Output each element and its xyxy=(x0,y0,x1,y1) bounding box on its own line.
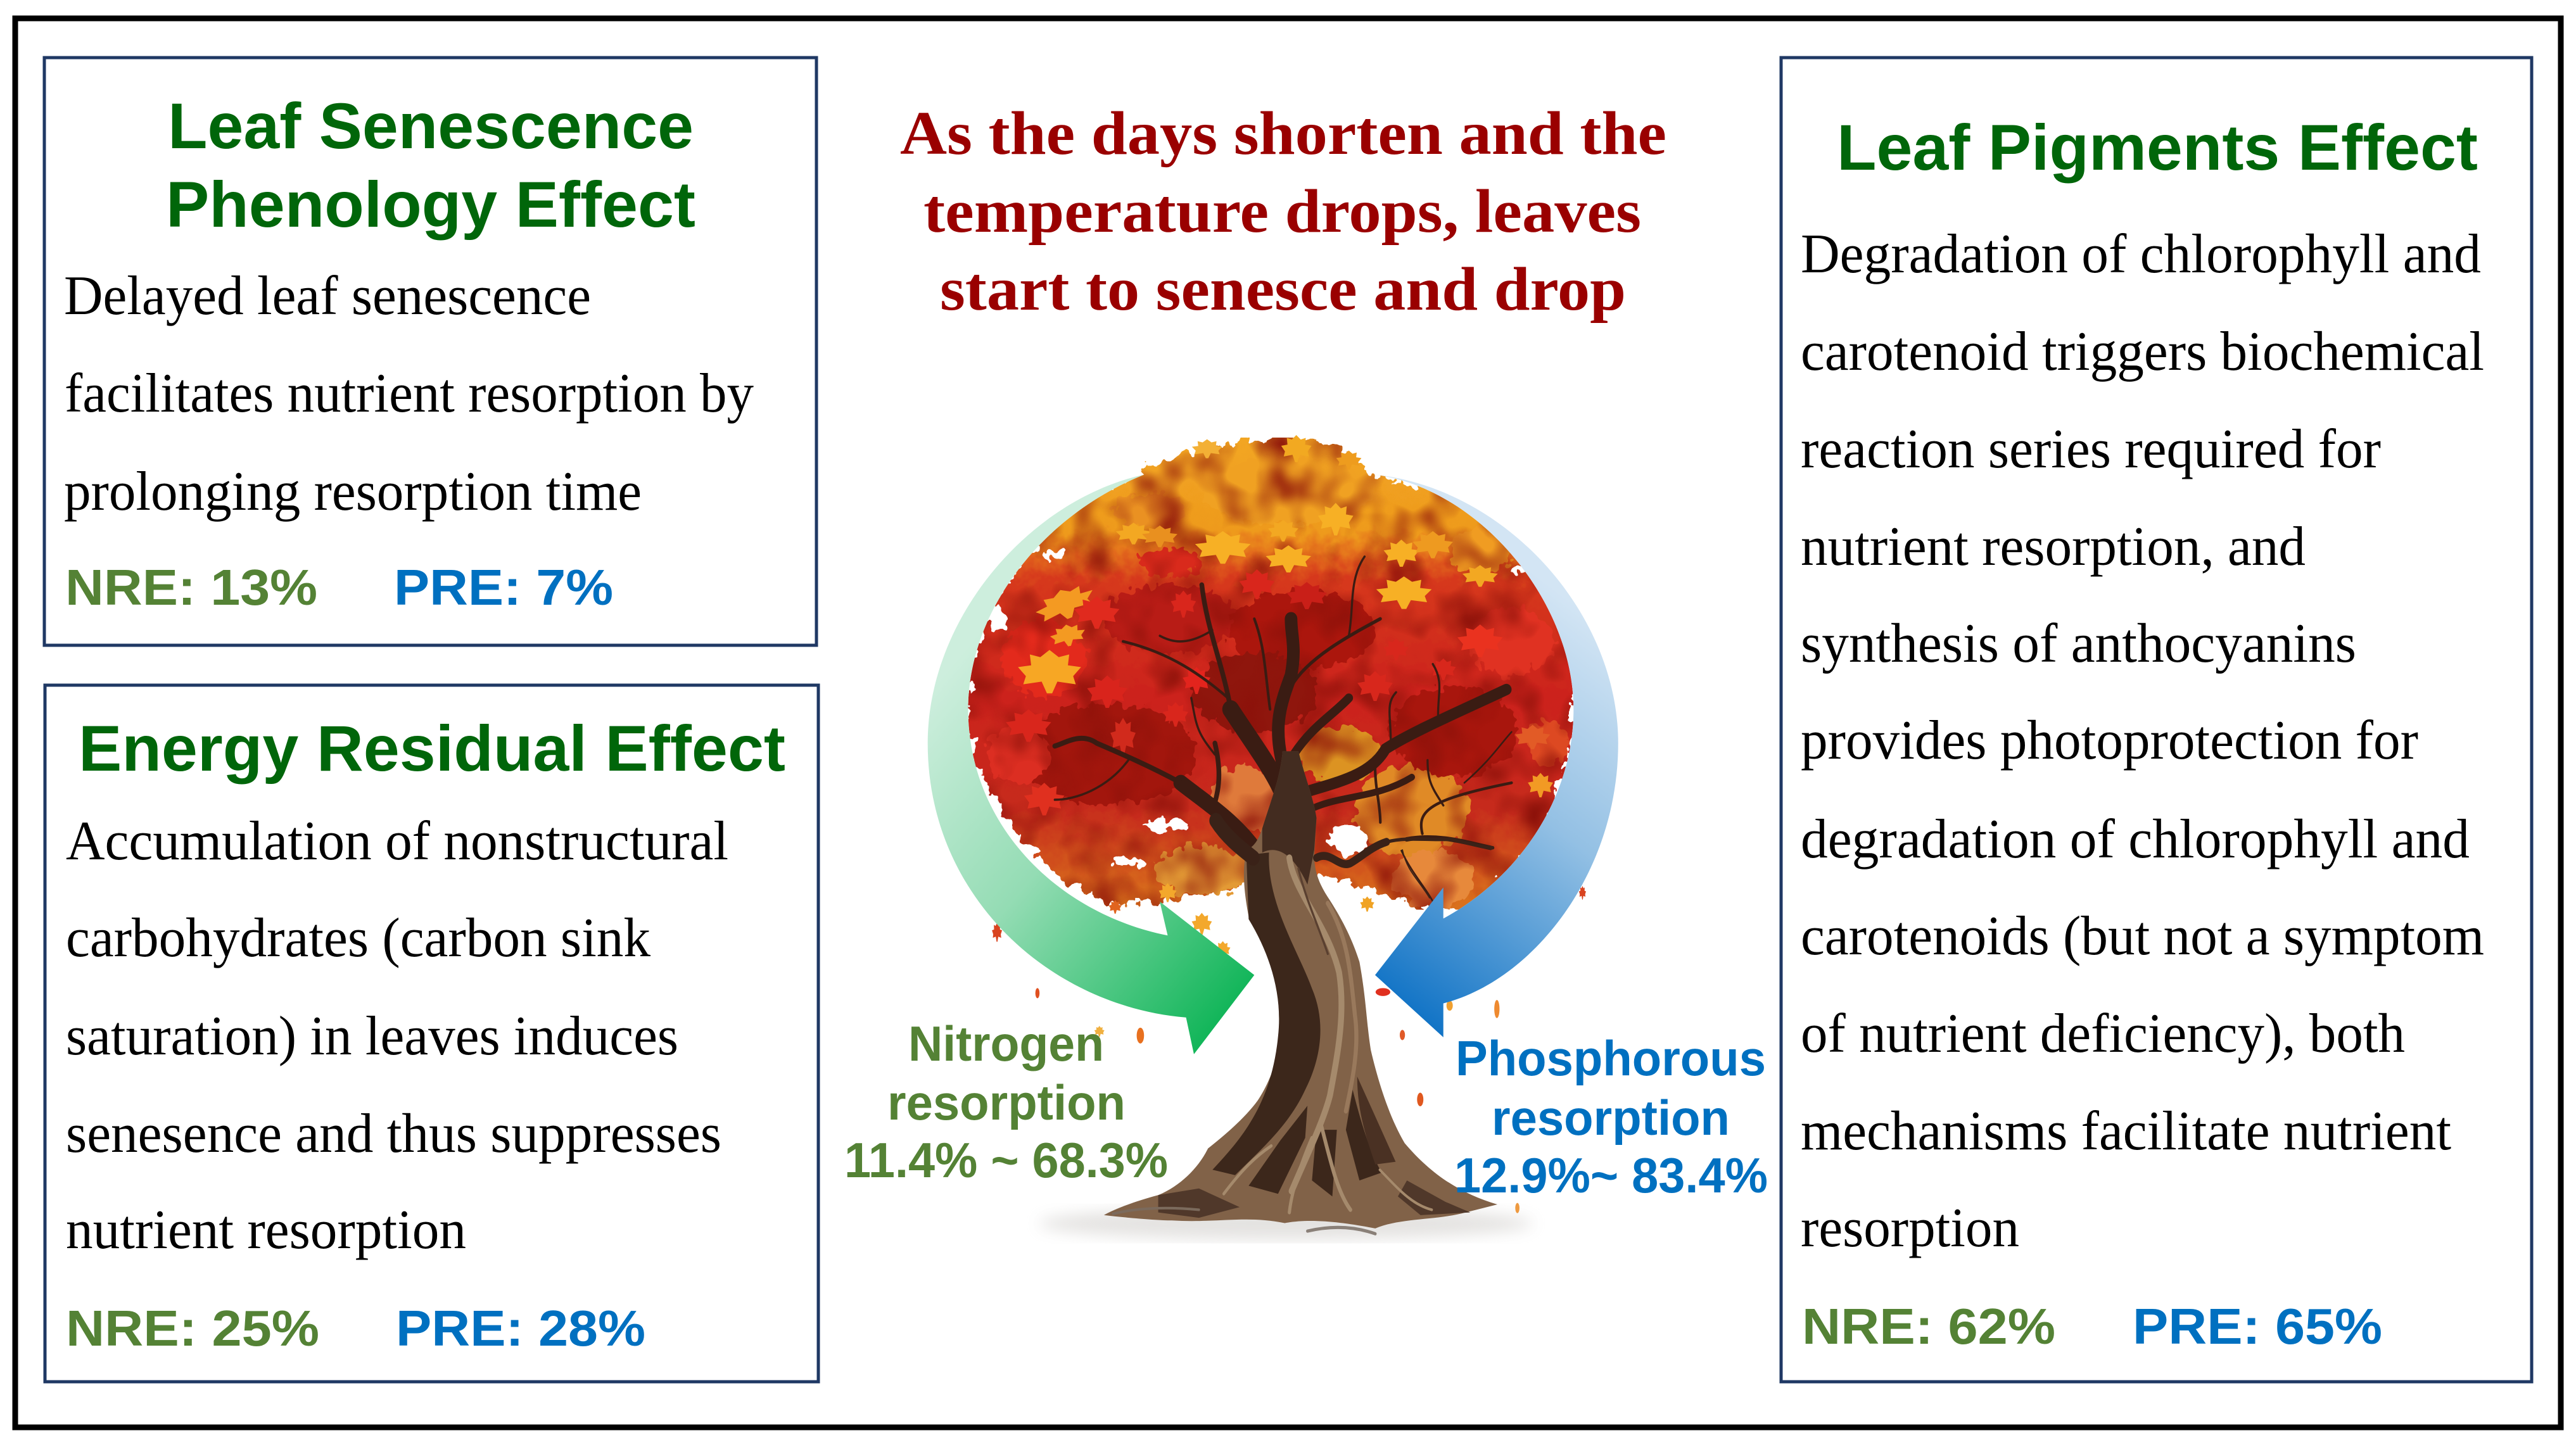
heading: leaf senescence phenology effect: Phenology Effect xyxy=(166,168,695,241)
body text xyxy=(66,811,728,1261)
title: temperature drops, leaves xyxy=(923,177,1641,246)
body text: Degradation of chlorophyll and xyxy=(1801,224,2481,285)
label: nitrogen resorption: 11.4% ~ 68.3% xyxy=(844,1132,1168,1188)
label: nitrogen resorption xyxy=(844,1016,1168,1188)
title xyxy=(900,99,1666,324)
tree branches xyxy=(1055,557,1512,902)
panel: energy residual effect xyxy=(45,685,818,1382)
body text: nutrient resorption, and xyxy=(1801,516,2306,578)
body text: of nutrient deficiency), both xyxy=(1801,1003,2405,1064)
label: nitrogen resorption: resorption xyxy=(887,1075,1126,1130)
title: start to senesce and drop xyxy=(940,255,1626,324)
panel: leaf pigments effect xyxy=(1781,58,2532,1382)
body text: saturation) in leaves induces xyxy=(66,1006,678,1067)
body text xyxy=(1801,224,2484,1259)
PRE value: PRE: 7% xyxy=(394,559,613,616)
branch stubs xyxy=(1216,821,1493,898)
body text xyxy=(64,265,754,522)
body text: carbohydrates (carbon sink xyxy=(66,907,650,969)
tree illustration with resorption arrows xyxy=(928,435,1618,1240)
falling leaves and arrows xyxy=(928,474,1618,1213)
body text: synthesis of anthocyanins xyxy=(1801,613,2356,674)
ground shadow xyxy=(1039,1207,1533,1240)
body text: Delayed leaf senescence xyxy=(64,265,591,327)
body text: mechanisms facilitate nutrient xyxy=(1801,1101,2451,1162)
panel: leaf senescence phenology effect xyxy=(44,58,816,645)
body text: carotenoids (but not a symptom xyxy=(1801,906,2484,967)
PRE value: PRE: 28% xyxy=(396,1300,645,1356)
body text: senesence and thus suppresses xyxy=(66,1103,721,1165)
label: phosphorous resorption: resorption xyxy=(1492,1090,1730,1146)
crown foliage xyxy=(968,435,1573,909)
body text: Accumulation of nonstructural xyxy=(66,811,728,872)
crown gaps xyxy=(987,549,1533,866)
PRE value: PRE: 65% xyxy=(2133,1298,2382,1355)
body text: facilitates nutrient resorption by xyxy=(65,363,754,424)
heading: energy residual effect: Energy Residual Effect xyxy=(79,712,785,785)
body text: carotenoid triggers biochemical xyxy=(1801,321,2484,382)
body text: resorption xyxy=(1801,1197,2019,1259)
body text: nutrient resorption xyxy=(66,1199,466,1261)
heading: leaf pigments effect: Leaf Pigments Effect xyxy=(1837,111,2478,184)
body text: degradation of chlorophyll and xyxy=(1801,809,2470,870)
body text: reaction series required for xyxy=(1801,419,2381,480)
body text: provides photoprotection for xyxy=(1801,710,2418,771)
heading: leaf senescence phenology effect: Leaf Senescence xyxy=(168,90,694,162)
label: phosphorous resorption xyxy=(1454,1030,1768,1203)
arrow: phosphorous resorption xyxy=(1375,474,1618,1037)
NRE value: NRE: 62% xyxy=(1802,1298,2055,1355)
title: As the days shorten and the xyxy=(900,99,1666,168)
NRE value: NRE: 13% xyxy=(65,559,317,616)
tree trunk and roots xyxy=(1104,751,1497,1234)
bark detail xyxy=(1113,751,1470,1234)
label: phosphorous resorption: 12.9%~ 83.4% xyxy=(1454,1147,1768,1203)
body text: prolonging resorption time xyxy=(64,461,642,522)
tree crown and branches xyxy=(968,435,1573,909)
label: nitrogen resorption: Nitrogen xyxy=(908,1016,1104,1071)
arrow: nitrogen resorption xyxy=(928,474,1254,1054)
leaves xyxy=(1006,435,1553,816)
NRE value: NRE: 25% xyxy=(66,1300,319,1356)
heading: leaf senescence phenology effect xyxy=(166,90,695,241)
label: phosphorous resorption: Phosphorous xyxy=(1456,1030,1766,1086)
